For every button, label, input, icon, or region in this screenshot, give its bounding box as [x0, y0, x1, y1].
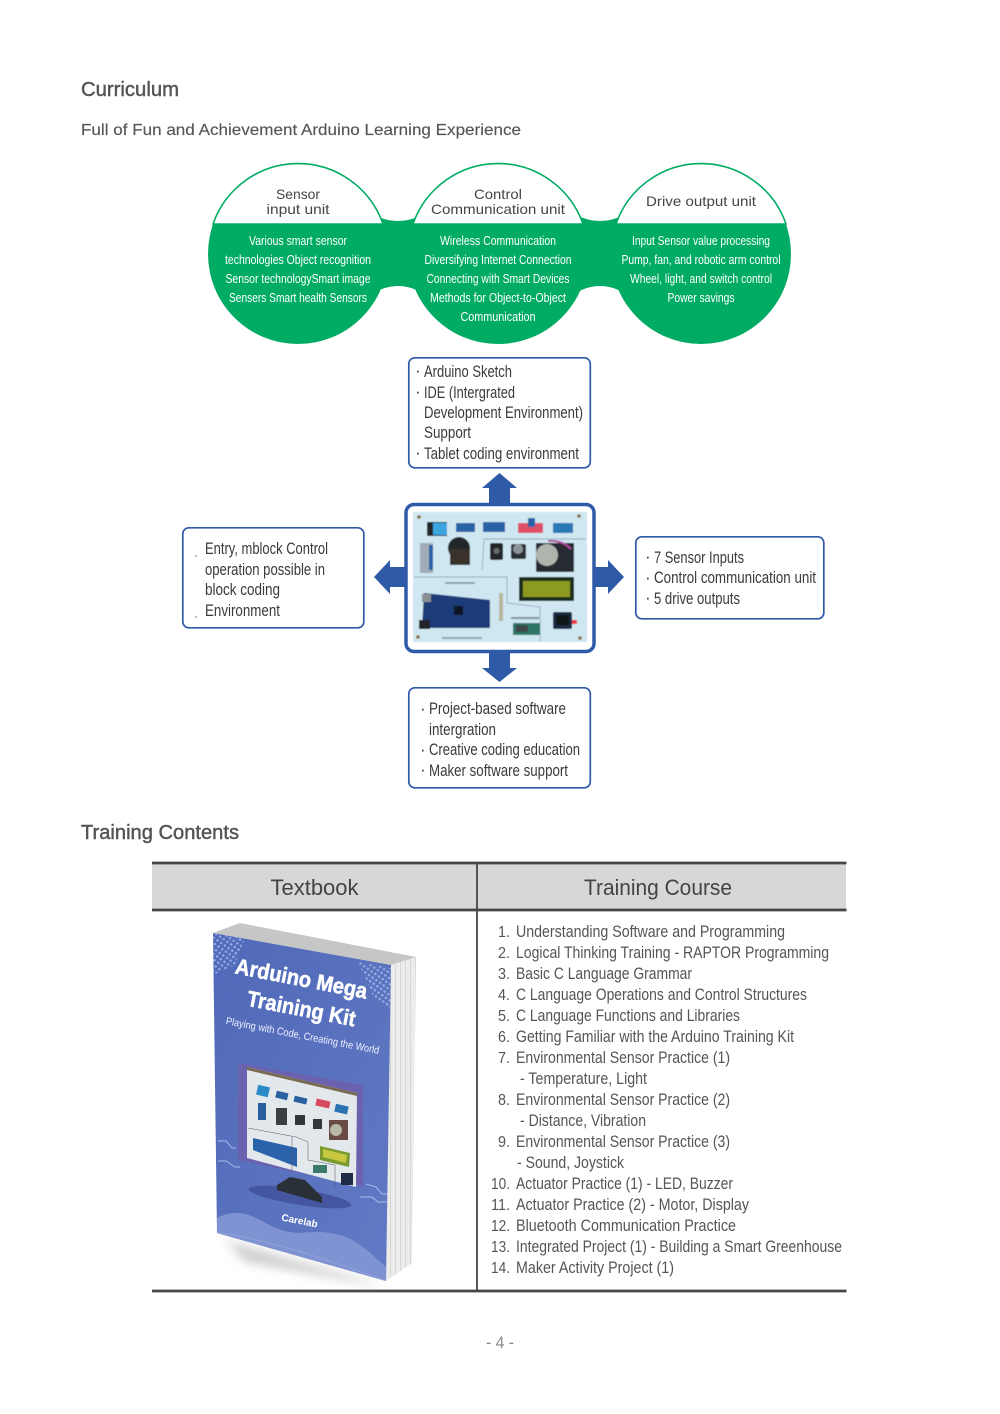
training course list: Actuator Practice (1) - LED, Buzzer: [516, 1174, 733, 1193]
training course list: Environmental Sensor Practice (2): [516, 1090, 730, 1109]
callout: project box (bottom): Maker software support: [429, 761, 568, 780]
callout: inputs and outputs box (right): 5 drive outputs: [654, 589, 740, 608]
unit: control communication: Control: [474, 186, 522, 202]
unit: sensor input: [208, 164, 388, 344]
callout: software box (top): ·: [415, 443, 421, 462]
unit: sensor input: technologies Object recognition: [225, 253, 371, 267]
training course list: 13.: [491, 1239, 510, 1256]
arrow: up: [482, 473, 517, 503]
training course list: 7.: [498, 1050, 510, 1067]
unit: sensor input: input unit: [266, 201, 330, 217]
panel: three unit circles: [208, 164, 791, 344]
callout: software box (top): [409, 358, 590, 468]
training course list: Logical Thinking Training - RAPTOR Programming: [516, 943, 829, 962]
callout: software box (top): Support: [424, 423, 471, 442]
page canvas: [81, 80, 846, 1348]
textbook illustration: Training Kit: [245, 986, 358, 1032]
training course list: Basic C Language Grammar: [516, 964, 692, 983]
training course list: Maker Activity Project (1): [516, 1258, 674, 1277]
callout: block coding box (left): [183, 528, 364, 628]
callout: block coding box (left): block coding: [205, 580, 280, 599]
callout: software box (top): ·: [415, 382, 421, 401]
training course list: 1.: [498, 924, 510, 941]
table header: Training Course: [584, 875, 732, 900]
arrow: down: [482, 652, 517, 682]
training course list: 4.: [498, 987, 510, 1004]
training course list: Actuator Practice (2) - Motor, Display: [516, 1195, 749, 1214]
callout: inputs and outputs box (right): 7 Sensor Inputs: [654, 548, 744, 567]
callout: block coding box (left): ·: [194, 611, 198, 623]
training course list: 2.: [498, 945, 510, 962]
training course list: - Temperature, Light: [520, 1069, 647, 1088]
callout: project box (bottom): Project-based software: [429, 699, 566, 718]
training course list: 5.: [498, 1008, 510, 1025]
unit: drive output: Power savings: [668, 291, 734, 305]
textbook illustration: [213, 923, 416, 1286]
arrow: right: [595, 560, 624, 594]
unit: control communication: [408, 164, 588, 344]
callout: inputs and outputs box (right): ·: [645, 547, 651, 566]
callout: project box (bottom): ·: [420, 760, 426, 779]
callout: project box (bottom): ·: [420, 740, 426, 759]
unit: drive output: [611, 164, 791, 344]
training course list: - Sound, Joystick: [517, 1153, 624, 1172]
table header: [152, 863, 846, 910]
unit: drive output: Input Sensor value processing: [632, 234, 770, 248]
unit: sensor input: Various smart sensor: [249, 234, 347, 248]
callout: inputs and outputs box (right): Control communication unit: [654, 568, 816, 587]
heading: Training Contents: Training Contents: [81, 822, 239, 844]
page number: - 4 -: [486, 1333, 514, 1352]
training course list: Getting Familiar with the Arduino Training Kit: [516, 1027, 794, 1046]
training course list: 9.: [498, 1134, 510, 1151]
training course list: 12.: [491, 1218, 510, 1235]
unit: control communication: Methods for Object-to-Object: [430, 291, 566, 305]
training course list: - Distance, Vibration: [520, 1111, 646, 1130]
subheading: Full of Fun and Achievement Arduino Learning Experience: [81, 122, 521, 139]
training course list: Understanding Software and Programming: [516, 922, 785, 941]
training course list: 11.: [491, 1197, 510, 1214]
callout: block coding box (left): ·: [194, 550, 198, 562]
callout: software box (top): Arduino Sketch: [424, 362, 512, 381]
callout: project box (bottom): [409, 688, 590, 788]
training course list: Environmental Sensor Practice (3): [516, 1132, 730, 1151]
training course list: 3.: [498, 966, 510, 983]
callout: block coding box (left): Environment: [205, 601, 280, 620]
callout: inputs and outputs box (right): ·: [645, 588, 651, 607]
callout: software box (top): Development Environment): [424, 403, 583, 422]
training course list: 14.: [491, 1260, 510, 1277]
callout: software box (top): ·: [415, 361, 421, 380]
unit: control communication: Connecting with Smart Devices: [426, 272, 570, 286]
unit: control communication: Communication: [460, 310, 536, 324]
training course list: 6.: [498, 1029, 510, 1046]
callout: block coding box (left): operation possible in: [205, 560, 325, 579]
unit: sensor input: Sensers Smart health Sensors: [229, 291, 367, 305]
table header: Textbook: [270, 875, 359, 900]
unit: sensor input: Sensor technologySmart image: [226, 272, 371, 286]
callout: block coding box (left): Entry, mblock Control: [205, 539, 328, 558]
heading: Curriculum: Curriculum: [81, 79, 179, 101]
callout: inputs and outputs box (right): ·: [645, 568, 651, 587]
textbook illustration: Playing with Code, Creating the World: [225, 1015, 380, 1057]
unit: sensor input: Sensor: [276, 186, 320, 202]
unit: control communication: Diversifying Internet Connection: [424, 253, 572, 267]
training course list: 10.: [491, 1176, 510, 1193]
unit: control communication: Communication unit: [431, 201, 565, 217]
table: training contents: [152, 863, 846, 1291]
training course list: Bluetooth Communication Practice: [516, 1216, 736, 1235]
callout: software box (top): Tablet coding environment: [424, 444, 579, 463]
training course list: C Language Functions and Libraries: [516, 1006, 740, 1025]
training course list: 8.: [498, 1092, 510, 1109]
unit: drive output: Drive output unit: [646, 193, 756, 209]
connectors between circles: [372, 214, 626, 294]
unit: control communication: Wireless Communication: [440, 234, 556, 248]
callout: inputs and outputs box (right): [636, 537, 824, 619]
callout: software box (top): IDE (Intergrated: [424, 383, 515, 402]
callout: project box (bottom): intergration: [429, 720, 496, 739]
training kit board photo: [406, 504, 594, 652]
unit: drive output: Wheel, light, and switch control: [630, 272, 772, 286]
callout: project box (bottom): ·: [420, 699, 426, 718]
textbook illustration: Carelab: [280, 1213, 319, 1230]
training course list: Environmental Sensor Practice (1): [516, 1048, 730, 1067]
textbook illustration: Arduino Mega: [233, 954, 370, 1004]
arrow: left: [374, 560, 405, 594]
callout: project box (bottom): Creative coding education: [429, 740, 580, 759]
unit: drive output: Pump, fan, and robotic arm control: [622, 253, 780, 267]
training course list: Integrated Project (1) - Building a Smart Greenhouse: [516, 1237, 842, 1256]
training course list: [491, 922, 842, 1277]
training course list: C Language Operations and Control Structures: [516, 985, 807, 1004]
